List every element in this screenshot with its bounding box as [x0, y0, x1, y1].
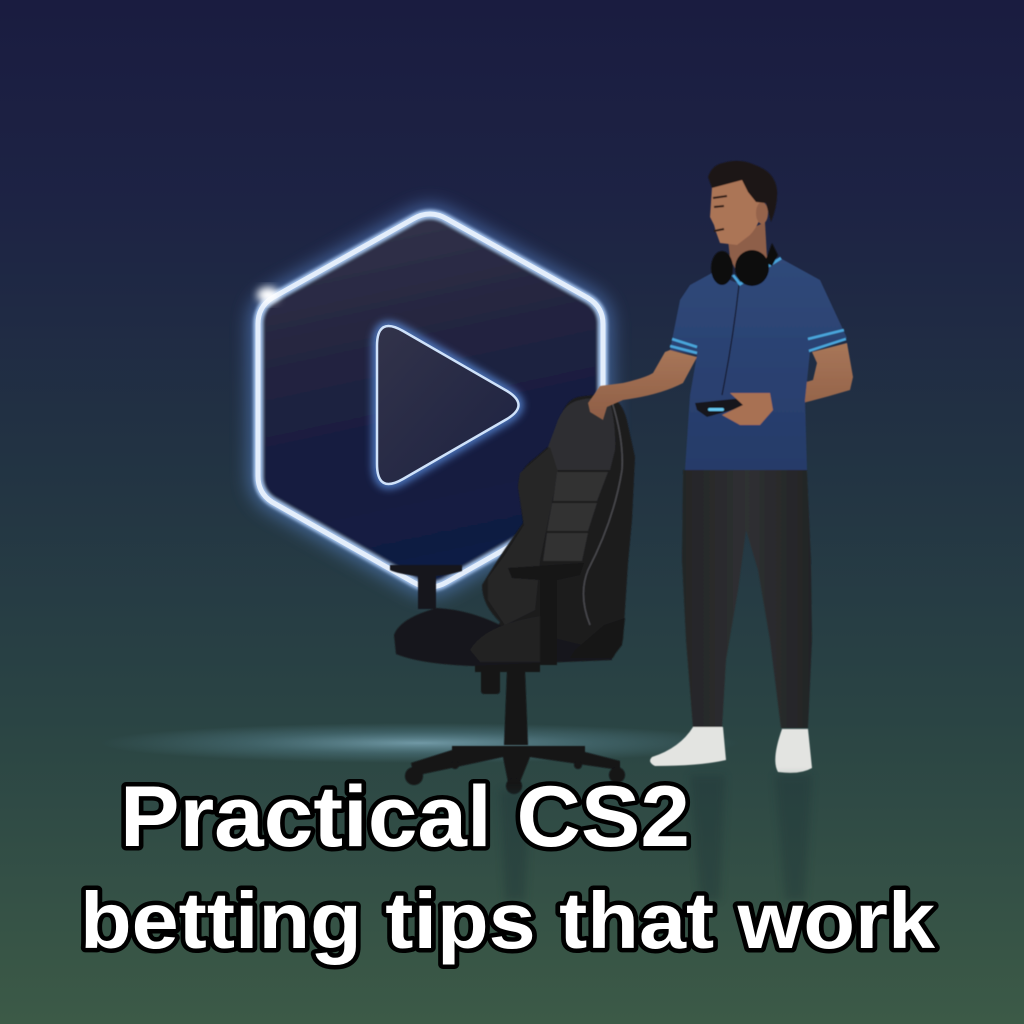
faint floor reflections	[500, 775, 812, 900]
trousers	[682, 470, 812, 728]
title line 2: betting tips that work	[80, 876, 936, 965]
controller	[695, 398, 743, 417]
chair armrests	[390, 565, 462, 609]
collar	[733, 258, 781, 284]
chair headrest pad	[548, 398, 615, 470]
chair side wing	[488, 447, 558, 625]
shoes	[650, 727, 812, 773]
chair back pads	[543, 472, 608, 561]
left arm	[588, 350, 697, 420]
face	[710, 175, 762, 245]
title	[80, 769, 936, 965]
headphone cable	[722, 285, 739, 395]
man standing with controller	[588, 161, 853, 773]
icon: play triangle	[377, 326, 518, 484]
headphones	[711, 243, 778, 286]
right arm	[722, 343, 853, 425]
chair seat	[394, 608, 612, 666]
gaming chair	[390, 395, 635, 794]
hair	[708, 161, 777, 222]
floor light glow	[100, 723, 740, 763]
title line 1: Practical CS2	[120, 769, 690, 865]
neck	[728, 222, 767, 283]
shirt	[670, 258, 847, 470]
face details	[713, 196, 727, 231]
chair base	[405, 660, 625, 794]
sleeve stripes	[670, 330, 846, 353]
chair backrest	[480, 395, 635, 662]
icon: glowing hexagon with play button	[257, 214, 603, 587]
hand on controller	[722, 393, 773, 425]
ear	[756, 202, 768, 224]
